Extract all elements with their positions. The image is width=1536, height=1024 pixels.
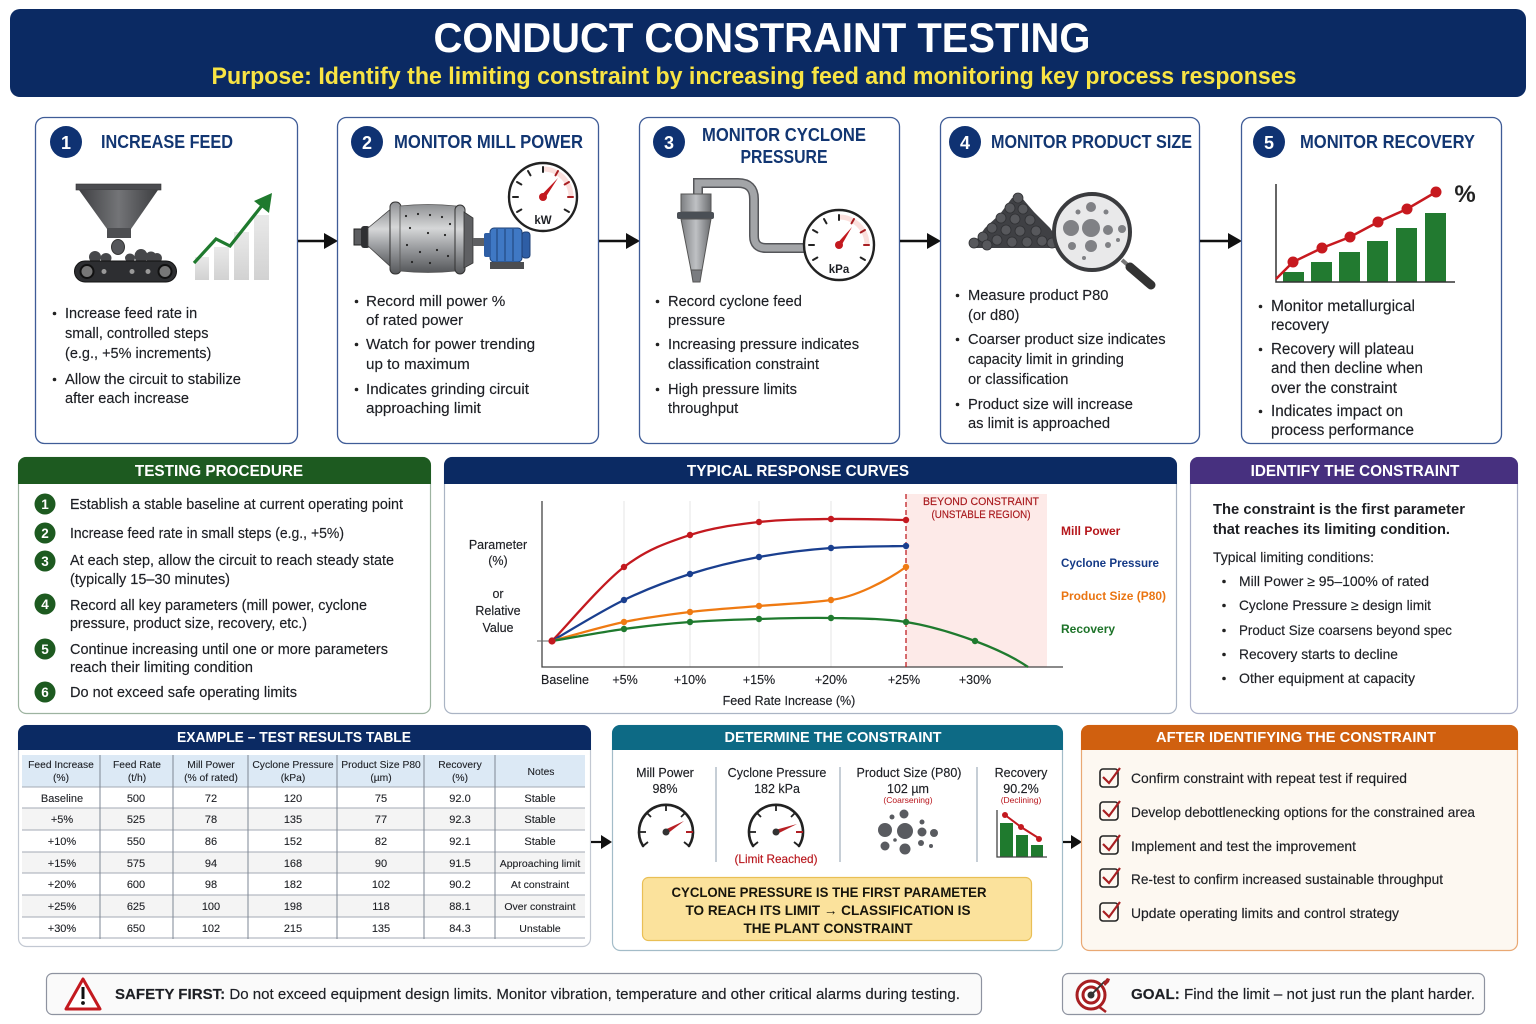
y axis label: Relative [475, 604, 521, 618]
results table: (% of rated) [184, 773, 238, 784]
results table: 198 [284, 901, 302, 913]
limiting conditions list: Typical limiting conditions: [1213, 550, 1374, 565]
bullet list: small, controlled steps [65, 326, 208, 342]
line chart: Baseline [541, 673, 589, 687]
step 1 card: increase feed: 1 [61, 133, 71, 153]
icon: magnifying glass with particles [1054, 194, 1151, 285]
panel: example test results table [18, 725, 591, 946]
arrow [298, 233, 338, 249]
legend: Product Size (P80) [1061, 589, 1166, 603]
metric: product size: (Coarsening) [883, 795, 933, 805]
metric: mill power [636, 766, 694, 846]
bullet list: throughput [668, 401, 738, 417]
panel: typical response curves [444, 457, 1177, 714]
safety banner [46, 974, 982, 1014]
metric: cyclone pressure: (Limit Reached) [734, 852, 818, 866]
callout: conclusion: THE PLANT CONSTRAINT [744, 920, 913, 936]
results table: 82 [375, 836, 387, 848]
metric: cyclone pressure: 182 kPa [754, 782, 800, 796]
numbered steps: 6 [41, 685, 49, 700]
results table: 90 [375, 858, 387, 870]
results table: +25% [48, 901, 76, 913]
panel: determine the constraint [612, 725, 1063, 950]
bullet list [956, 288, 1166, 432]
results table: 500 [127, 793, 145, 805]
bullet list: Indicates impact on [1271, 403, 1403, 420]
numbered steps: 3 [41, 554, 49, 569]
arrow [1200, 233, 1242, 249]
bullet list: Product size will increase [968, 397, 1133, 413]
bullet list [53, 306, 241, 407]
arrow [1063, 835, 1082, 849]
heading: MONITOR RECOVERY [1300, 131, 1476, 152]
checklist: Develop debottlenecking options for the constrained area [1131, 805, 1475, 820]
heading: TESTING PROCEDURE [135, 463, 303, 480]
safety text: SAFETY FIRST: Do not exceed equipment design limits. Monitor vibration, temperature and other critical alarms during testing. [115, 987, 960, 1003]
results table: Unstable [519, 923, 561, 935]
legend [1061, 524, 1166, 636]
bullet list: up to maximum [366, 356, 470, 373]
bullet list: of rated power [366, 312, 463, 329]
bullet list: Monitor metallurgical [1271, 298, 1415, 315]
results table: 135 [372, 923, 390, 935]
results table: Feed Rate [113, 760, 161, 771]
bullet list: over the constraint [1271, 380, 1398, 397]
results table: 135 [284, 814, 302, 826]
metric: recovery: (Declining) [1001, 795, 1041, 805]
icon: hydrocyclone and pipe [677, 183, 808, 282]
legend: Mill Power [1061, 524, 1121, 538]
panel: after identifying the constraint [1081, 725, 1518, 950]
results table: 100 [202, 901, 220, 913]
results table: Feed Increase [28, 760, 94, 771]
limiting conditions list: Other equipment at capacity [1239, 671, 1415, 686]
bullet list: High pressure limits [668, 382, 797, 398]
metric: recovery [995, 766, 1048, 857]
callout: conclusion: TO REACH ITS LIMIT → CLASSIFICATION IS [686, 902, 970, 918]
metric: cyclone pressure [728, 766, 826, 866]
results table: +20% [48, 879, 76, 891]
bullet list: Record cyclone feed [668, 294, 802, 310]
icon: ball mill with motor [354, 202, 530, 274]
numbered steps: 4 [41, 597, 49, 612]
results table: (%) [452, 773, 468, 784]
callout: conclusion: CYCLONE PRESSURE IS THE FIRST PARAMETER [672, 884, 986, 900]
bullet list: and then decline when [1271, 360, 1423, 377]
panel: identify the constraint [1190, 457, 1518, 714]
definition [1213, 501, 1465, 538]
step 3 card: monitor cyclone pressure: PRESSURE [740, 146, 828, 167]
icon: ore pile [969, 193, 1058, 250]
results table: (µm) [370, 773, 392, 784]
results table: Recovery [438, 760, 483, 771]
legend: Recovery [1061, 622, 1115, 636]
limiting conditions list: Mill Power ≥ 95–100% of rated [1239, 574, 1429, 589]
results table: (%) [53, 773, 69, 784]
goal text: GOAL: Find the limit – not just run the plant harder. [1131, 987, 1475, 1003]
results table: (t/h) [128, 773, 146, 784]
results table: 120 [284, 793, 302, 805]
numbered steps: Establish a stable baseline at current operating point [70, 497, 403, 513]
heading: INCREASE FEED [101, 131, 233, 152]
numbered steps: pressure, product size, recovery, etc.) [70, 616, 307, 632]
heading: DETERMINE THE CONSTRAINT [724, 730, 942, 746]
step 4 card: monitor product size: 4 [960, 133, 970, 153]
results table: +15% [48, 858, 76, 870]
bullet list: or classification [968, 372, 1068, 388]
icon: hopper and conveyor with rising chart [74, 184, 272, 282]
bullet list: Record mill power % [366, 293, 505, 310]
step 1 card: increase feed [36, 118, 298, 444]
numbered steps: 2 [41, 526, 49, 541]
bullet list: Allow the circuit to stabilize [65, 372, 241, 388]
checklist: Re-test to confirm increased sustainable throughput [1131, 872, 1443, 887]
limiting conditions list: Product Size coarsens beyond spec [1239, 623, 1452, 638]
bullet list: Increase feed rate in [65, 306, 197, 322]
results table: 550 [127, 836, 145, 848]
results table: +5% [51, 814, 73, 826]
bullet list: Watch for power trending [366, 336, 535, 353]
results table: 118 [372, 901, 390, 913]
line chart: +20% [815, 673, 847, 687]
callout: conclusion [642, 878, 1032, 940]
icon: power gauge kW: kW [534, 215, 552, 227]
results table: 88.1 [449, 901, 471, 913]
results table: (kPa) [281, 773, 305, 784]
metric: product size: Product Size (P80) [857, 766, 961, 780]
goal banner [1062, 974, 1484, 1014]
numbered steps: Do not exceed safe operating limits [70, 685, 297, 701]
bullet list: Increasing pressure indicates [668, 337, 859, 353]
results table [22, 755, 585, 939]
numbered steps: Continue increasing until one or more parameters [70, 642, 388, 658]
heading: EXAMPLE – TEST RESULTS TABLE [177, 730, 411, 746]
line chart: BEYOND CONSTRAINT [923, 496, 1039, 508]
checklist [1100, 768, 1475, 921]
results table: At constraint [511, 879, 569, 891]
y axis label: Value [482, 621, 514, 635]
purpose subtitle: Purpose: Identify the limiting constraint by increasing feed and monitoring key process responses [212, 63, 1296, 90]
numbered steps: Record all key parameters (mill power, cyclone [70, 598, 367, 614]
y axis label [469, 538, 527, 635]
metric: mill power: Mill Power [636, 766, 694, 780]
results table: Stable [524, 836, 556, 848]
definition: The constraint is the first parameter [1213, 501, 1465, 518]
line chart: Feed Rate Increase (%) [723, 694, 855, 708]
icon: recovery bar and line chart [1276, 181, 1476, 282]
results table: 84.3 [449, 923, 471, 935]
limiting conditions list: Cyclone Pressure ≥ design limit [1239, 598, 1431, 613]
results table: 102 [202, 923, 220, 935]
results table: 600 [127, 879, 145, 891]
limiting conditions list: Recovery starts to decline [1239, 647, 1398, 662]
icon: target with arrow [1077, 978, 1110, 1012]
results table: 625 [127, 901, 145, 913]
bullet list [1259, 298, 1423, 439]
bullet list: classification constraint [668, 357, 819, 373]
results table: +10% [48, 836, 76, 848]
line chart: +25% [888, 673, 920, 687]
icon: warning triangle [66, 979, 100, 1009]
bullet list: as limit is approached [968, 416, 1110, 432]
step 3 card: monitor cyclone pressure: 3 [664, 133, 674, 153]
icon: pressure gauge kPa [804, 210, 874, 280]
y axis label: Parameter [469, 538, 527, 552]
results table: 90.2 [449, 879, 471, 891]
numbered steps [34, 494, 403, 702]
results table: Over constraint [504, 901, 576, 913]
numbered steps: (typically 15–30 minutes) [70, 572, 230, 588]
metric: product size [857, 766, 961, 854]
numbered steps: 1 [41, 497, 49, 512]
results table: 575 [127, 858, 145, 870]
results table: Product Size P80 [341, 760, 421, 771]
metric: product size: 102 µm [887, 782, 929, 796]
numbered steps: Increase feed rate in small steps (e.g., +5%) [70, 526, 344, 542]
panel: testing procedure [18, 457, 431, 714]
checklist: Confirm constraint with repeat test if required [1131, 771, 1407, 786]
step 2 card: monitor mill power [338, 118, 598, 444]
results table: 92.3 [449, 814, 471, 826]
y axis label: or [492, 587, 504, 601]
line chart: (UNSTABLE REGION) [932, 509, 1030, 521]
results table: 525 [127, 814, 145, 826]
results table: 72 [205, 793, 217, 805]
bullet list: (e.g., +5% increments) [65, 346, 211, 362]
results table: 91.5 [449, 858, 471, 870]
results table: 98 [205, 879, 217, 891]
heading: MONITOR CYCLONE [702, 124, 866, 145]
limiting conditions list [1213, 550, 1452, 686]
y axis label: (%) [488, 554, 508, 568]
bullet list [355, 293, 535, 417]
arrow [900, 233, 941, 249]
metric: cyclone pressure: Cyclone Pressure [728, 766, 826, 780]
checklist: Update operating limits and control strategy [1131, 906, 1399, 921]
bullet list: recovery [1271, 317, 1329, 334]
bullet list: Coarser product size indicates [968, 332, 1166, 348]
results table: Baseline [41, 793, 83, 805]
heading: MONITOR MILL POWER [394, 131, 583, 152]
definition: that reaches its limiting condition. [1213, 521, 1450, 538]
arrow [599, 233, 640, 249]
line chart [537, 494, 1063, 708]
bullet list: process performance [1271, 422, 1414, 439]
results table: 182 [284, 879, 302, 891]
results table: 78 [205, 814, 217, 826]
main title: CONDUCT CONSTRAINT TESTING [434, 14, 1090, 61]
icon: power gauge kW [509, 163, 577, 231]
bullet list: (or d80) [968, 308, 1019, 324]
step 5 card: monitor recovery [1242, 118, 1502, 444]
results table: 102 [372, 879, 390, 891]
bullet list: Recovery will plateau [1271, 341, 1414, 358]
results table: 650 [127, 923, 145, 935]
checklist: Implement and test the improvement [1131, 839, 1356, 854]
results table: 92.1 [449, 836, 471, 848]
icon: pressure gauge kPa: kPa [829, 264, 850, 276]
line chart: +30% [959, 673, 991, 687]
bullet list: approaching limit [366, 400, 482, 417]
metric: recovery: 90.2% [1003, 782, 1039, 796]
results table: 94 [205, 858, 217, 870]
results table: +30% [48, 923, 76, 935]
line chart: +15% [743, 673, 775, 687]
metric: mill power: 98% [652, 782, 678, 796]
arrow [591, 835, 612, 849]
bullet list: Measure product P80 [968, 288, 1108, 304]
step 5 card: monitor recovery: 5 [1264, 133, 1274, 153]
results table: 86 [205, 836, 217, 848]
icon: recovery bar and line chart: % [1454, 181, 1476, 208]
results table: 168 [284, 858, 302, 870]
step 3 card: monitor cyclone pressure [640, 118, 900, 444]
heading: TYPICAL RESPONSE CURVES [687, 463, 909, 480]
results table: 75 [375, 793, 387, 805]
line chart: +5% [612, 673, 638, 687]
results table: 92.0 [449, 793, 471, 805]
results table: Cyclone Pressure [252, 760, 334, 771]
heading: AFTER IDENTIFYING THE CONSTRAINT [1156, 730, 1436, 746]
bullet list: capacity limit in grinding [968, 352, 1124, 368]
results table: 152 [284, 836, 302, 848]
line chart: +10% [674, 673, 706, 687]
step 4 card: monitor product size [940, 118, 1200, 444]
results table: Stable [524, 814, 556, 826]
metric: recovery: Recovery [995, 766, 1048, 780]
bullet list: Indicates grinding circuit [366, 381, 530, 398]
legend: Cyclone Pressure [1061, 556, 1159, 570]
bullet list [656, 294, 859, 417]
results table: Notes [528, 767, 554, 778]
results table: 77 [375, 814, 387, 826]
bullet list: after each increase [65, 391, 189, 407]
numbered steps: 5 [41, 642, 49, 657]
results table: Stable [524, 793, 556, 805]
heading: IDENTIFY THE CONSTRAINT [1251, 463, 1460, 480]
results table: 215 [284, 923, 302, 935]
results table: Mill Power [187, 760, 235, 771]
heading: MONITOR PRODUCT SIZE [991, 131, 1192, 152]
step 2 card: monitor mill power: 2 [362, 133, 372, 153]
results table: Approaching limit [500, 858, 580, 870]
numbered steps: At each step, allow the circuit to reach steady state [70, 553, 394, 569]
bullet list: pressure [668, 313, 725, 329]
title banner [10, 9, 1526, 97]
numbered steps: reach their limiting condition [70, 660, 253, 676]
